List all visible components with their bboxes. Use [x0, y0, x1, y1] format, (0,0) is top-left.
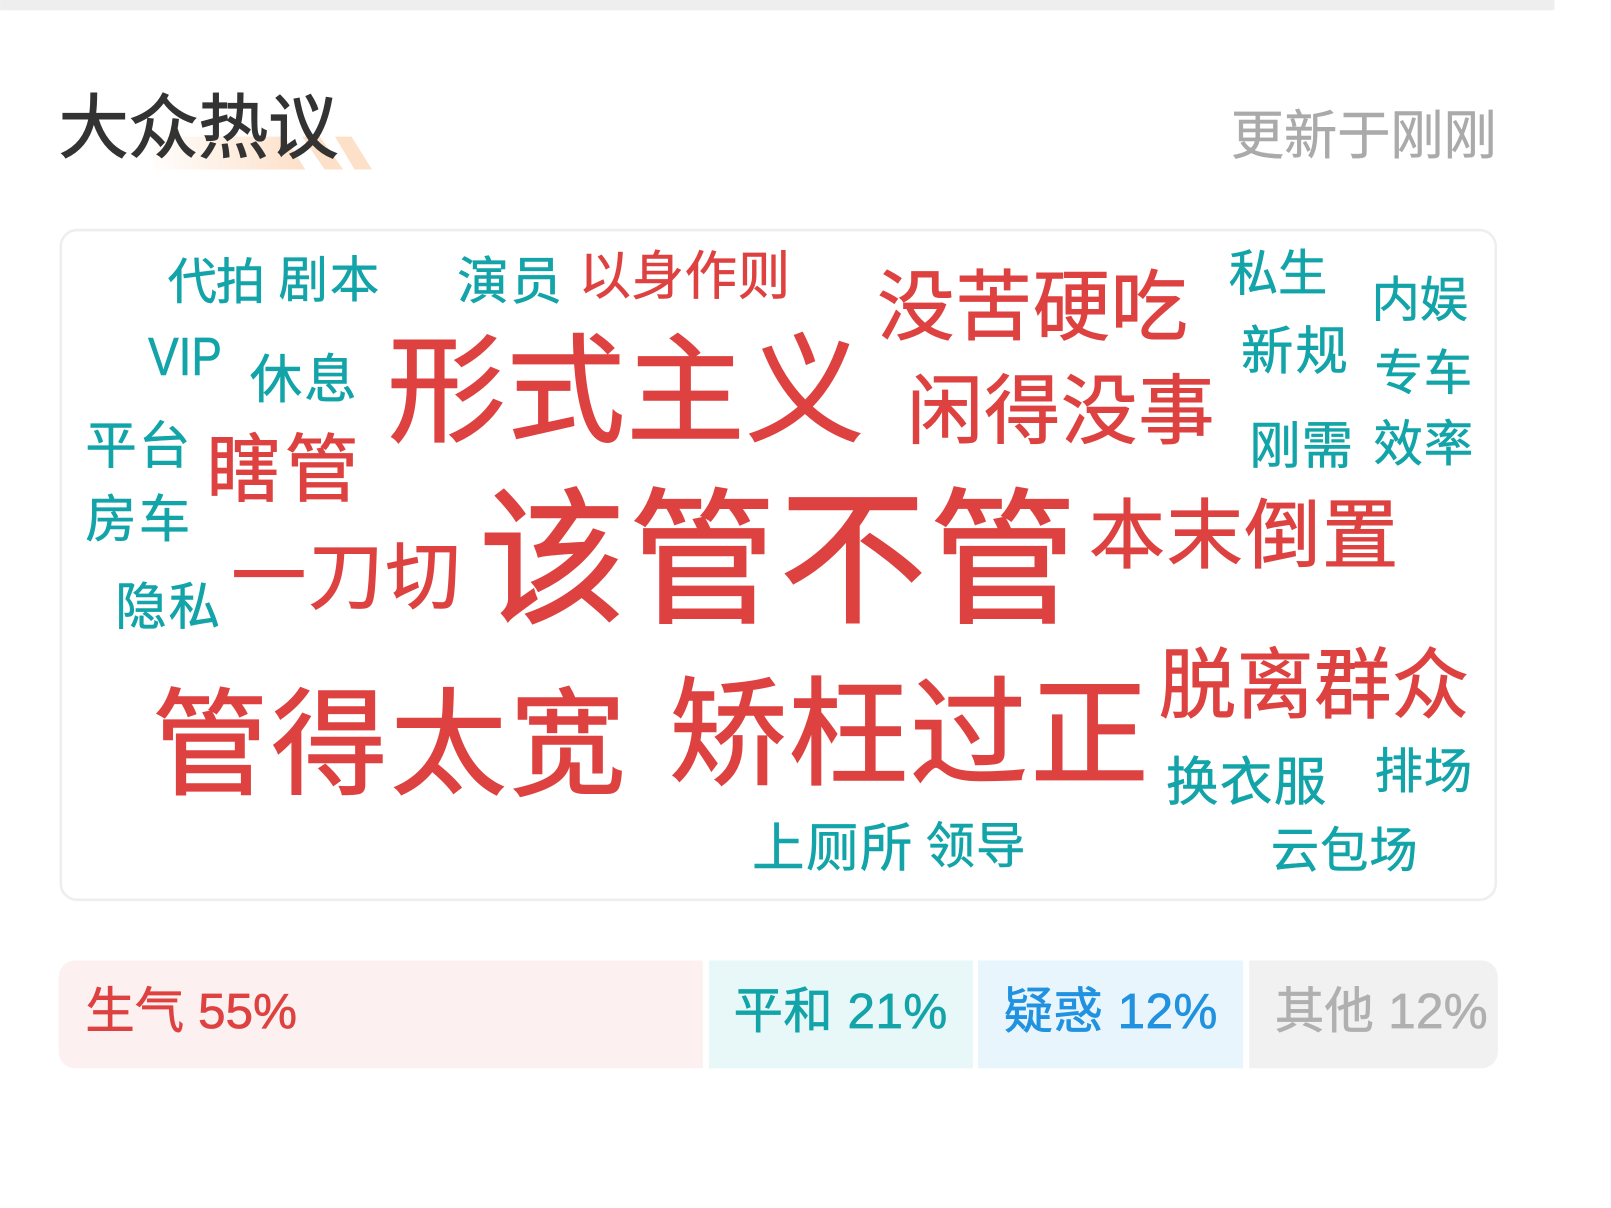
teal and red keywords: 隐私 — [115, 579, 220, 636]
teal and red keywords: 私生 — [1229, 247, 1327, 302]
angry segment — [59, 960, 703, 1068]
other segment — [1249, 960, 1498, 1068]
teal and red keywords: 专车 — [1375, 346, 1472, 400]
heading decoration: stripes — [144, 137, 372, 169]
title: 大众热议 — [59, 89, 338, 167]
teal and red keywords: 排场 — [1375, 745, 1472, 799]
teal and red keywords: 效率 — [1374, 417, 1473, 472]
angry segment: 生气 55% — [85, 984, 297, 1039]
confused segment — [978, 960, 1243, 1068]
teal and red keywords: 休息 — [250, 352, 357, 410]
teal and red keywords: 新规 — [1241, 323, 1348, 381]
teal and red keywords: VIP — [148, 328, 222, 387]
confused segment: 疑惑 12% — [1004, 984, 1217, 1039]
teal and red keywords: 刚需 — [1249, 417, 1353, 474]
teal and red keywords: 换衣服 — [1166, 754, 1326, 812]
teal and red keywords: 剧本 — [279, 253, 379, 308]
sentiment bar — [59, 960, 1498, 1068]
teal and red keywords: 管得太宽 — [152, 680, 626, 810]
teal and red keywords: 平台 — [85, 417, 190, 474]
teal and red keywords: 房车 — [85, 491, 190, 548]
calm segment — [709, 960, 973, 1068]
teal and red keywords: 矫枉过正 — [669, 670, 1149, 802]
panel: word cloud — [61, 230, 1496, 900]
teal and red keywords: 本末倒置 — [1089, 494, 1398, 579]
teal and red keywords: 领导 — [926, 819, 1025, 874]
teal and red keywords: 脱离群众 — [1159, 643, 1469, 729]
teal and red keywords: 云包场 — [1271, 824, 1418, 878]
teal and red keywords: 瞎管 — [207, 428, 359, 511]
teal and red keywords — [85, 247, 1473, 878]
calm segment: 平和 21% — [734, 984, 947, 1039]
teal and red keywords: 该管不管 — [479, 479, 1077, 643]
teal and red keywords: 闲得没事 — [907, 370, 1214, 455]
teal and red keywords: 演员 — [457, 253, 562, 310]
teal and red keywords: 上厕所 — [752, 820, 912, 878]
teal and red keywords: 内娱 — [1371, 273, 1468, 327]
teal and red keywords: 没苦硬吃 — [877, 265, 1188, 351]
update time: 更新于刚刚 — [1231, 107, 1497, 166]
other segment: 其他 12% — [1275, 984, 1488, 1039]
teal and red keywords: 一刀切 — [231, 535, 460, 619]
teal and red keywords: 以身作则 — [578, 248, 790, 306]
teal and red keywords: 代拍 — [168, 255, 265, 310]
teal and red keywords: 形式主义 — [387, 326, 864, 458]
